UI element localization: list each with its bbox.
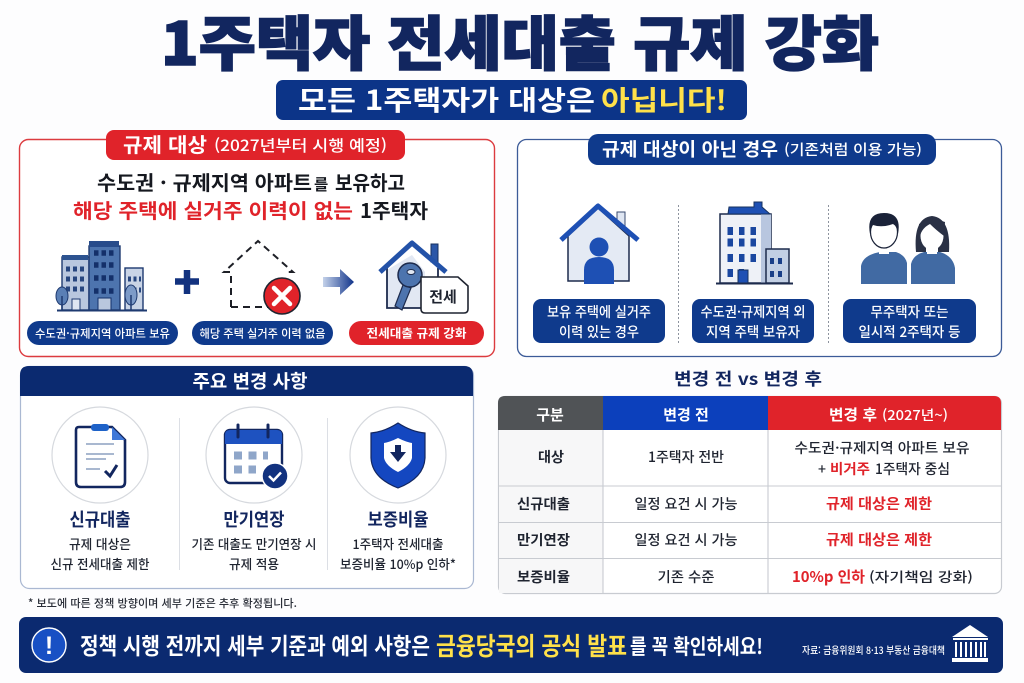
- source: 자료: 금융위원회 8·13 부동산 금융대책: [802, 642, 945, 657]
- item: maturity extension: 만기연장: [224, 506, 285, 532]
- row: maturity extension: 만기연장: [517, 530, 570, 550]
- item: guarantee ratio: 1주택자 전세대출: [352, 534, 444, 553]
- target description: 보유하고: [335, 167, 405, 196]
- subtitle banner: [276, 78, 747, 120]
- row: target: 대상: [538, 447, 564, 467]
- target description: [73, 167, 428, 224]
- panel heading: regulated target: 규제 대상: [123, 129, 207, 158]
- item: new loans: 신규 전세대출 제한: [50, 554, 150, 573]
- row: target: 1주택자 중심: [875, 459, 950, 479]
- icon: two people: [861, 213, 955, 284]
- row: target: 비거주: [830, 459, 870, 479]
- item: new loans: [50, 407, 150, 573]
- comparison table: [498, 396, 1002, 594]
- subtitle banner: 아닙니다!: [601, 78, 727, 118]
- panel heading: not regulated: [588, 134, 936, 165]
- item: new loans: 규제 대상은: [69, 534, 131, 553]
- panel heading: not regulated: 규제 대상이 아닌 경우: [602, 136, 778, 162]
- target description: 수도권 · 규제지역 아파트: [97, 167, 312, 196]
- label: tighter regulation: 전세대출 규제 강화: [366, 324, 466, 342]
- row: target: +: [818, 459, 826, 479]
- label: has lived in home: [533, 299, 665, 343]
- row: target: 1주택자 전반: [648, 447, 724, 467]
- panel heading: not regulated: (기존처럼 이용 가능): [784, 139, 922, 160]
- label: no residence history: 해당 주택 실거주 이력 없음: [200, 326, 326, 342]
- label: non-owner or temporary two-home owner: 무주택자 또는: [870, 302, 949, 322]
- panel: key changes: [20, 366, 474, 588]
- icon: house with key and jeonse document: 전세: [429, 286, 457, 307]
- row: maturity extension: 일정 요건 시 가능: [634, 530, 738, 550]
- label: apartment ownership: [27, 321, 178, 345]
- icon: clipboard: [76, 424, 125, 487]
- icon: institution building: [952, 625, 988, 662]
- header: after: [768, 396, 1001, 430]
- row: guarantee ratio: (자기책임 강화): [869, 566, 973, 586]
- icon: exclamation: [32, 628, 66, 662]
- header: before: 변경 전: [663, 404, 709, 425]
- icon: shield: [371, 423, 425, 488]
- target description: 를: [314, 173, 328, 195]
- item: maturity extension: 규제 적용: [229, 554, 279, 573]
- label: outside regulated area: 지역 주택 보유자: [706, 322, 800, 342]
- label: has lived in home: 보유 주택에 실거주: [547, 302, 651, 322]
- label: non-owner or temporary two-home owner: 일시적 2주택자 등: [858, 322, 961, 342]
- row: guarantee ratio: 보증비율: [517, 567, 570, 587]
- item: guarantee ratio: 보증비율: [368, 506, 428, 532]
- label: has lived in home: 이력 있는 경우: [559, 322, 639, 342]
- label: no residence history: [192, 321, 333, 345]
- item: guarantee ratio: 보증비율 10%p 인하*: [340, 554, 456, 573]
- header: category: [498, 396, 603, 430]
- panel heading: regulated target: (2027년부터 시행 예정): [214, 134, 387, 156]
- panel heading: key changes: 주요 변경 사항: [192, 368, 308, 394]
- panel heading: regulated target: [106, 129, 405, 160]
- label: apartment ownership: 수도권·규제지역 아파트 보유: [35, 326, 170, 342]
- item: guarantee ratio: [340, 407, 456, 573]
- panel: regulated target: [20, 129, 494, 356]
- target description: 1주택자: [360, 195, 428, 224]
- icon: office building: [716, 202, 793, 284]
- icon: calendar with check: [225, 425, 288, 489]
- icon: apartment buildings: [56, 241, 147, 311]
- row: target: 수도권·규제지역 아파트 보유: [794, 438, 970, 458]
- footer message: 금융당국의 공식 발표: [436, 627, 627, 663]
- label: outside regulated area: 수도권·규제지역 외: [700, 302, 806, 322]
- icon: plus: [175, 270, 199, 294]
- panel heading: key changes: [20, 366, 473, 396]
- header: after: 변경 후: [829, 404, 877, 425]
- label: tighter regulation: [349, 321, 484, 345]
- icon: dashed house with x: [224, 241, 300, 314]
- target description: 해당 주택에 실거주 이력이 없는: [73, 195, 353, 224]
- item: maturity extension: 기존 대출도 만기연장 시: [192, 534, 316, 553]
- footer message: [80, 627, 763, 663]
- row: new loans: 규제 대상은 제한: [826, 493, 932, 514]
- arrow: [323, 269, 354, 295]
- label: outside regulated area: [692, 299, 814, 343]
- header: before: [603, 396, 768, 430]
- row: maturity extension: [517, 529, 932, 550]
- icon: exclamation: !: [45, 632, 53, 660]
- label: non-owner or temporary two-home owner: [843, 299, 976, 343]
- header: category: 구분: [536, 404, 564, 425]
- item: new loans: 신규대출: [70, 506, 130, 532]
- row: new loans: [517, 493, 932, 514]
- icon: house with resident: [561, 206, 638, 284]
- row: target: [538, 438, 970, 479]
- panel: not regulated: [518, 134, 1002, 356]
- icon: house with key and jeonse document: [380, 243, 468, 313]
- row: maturity extension: 규제 대상은 제한: [826, 529, 932, 550]
- row: new loans: 신규대출: [517, 494, 570, 514]
- footnote: * 보도에 따른 정책 방향이며 세부 기준은 추후 확정됩니다.: [28, 595, 297, 611]
- row: guarantee ratio: [517, 566, 973, 587]
- item: maturity extension: [192, 407, 316, 573]
- footer banner: [19, 617, 1003, 673]
- row: new loans: 일정 요건 시 가능: [634, 494, 738, 514]
- footer message: 정책 시행 전까지 세부 기준과 예외 사항은: [80, 627, 430, 661]
- row: guarantee ratio: 기존 수준: [658, 567, 715, 587]
- row: guarantee ratio: 10%p 인하: [792, 566, 865, 587]
- header: after: (2027년~): [882, 404, 948, 424]
- footer message: 를 꼭 확인하세요!: [630, 631, 763, 661]
- table row heads background: [499, 430, 603, 593]
- subtitle banner: 모든 1주택자가 대상은: [298, 78, 595, 118]
- table heading: 변경 전 vs 변경 후: [674, 365, 822, 390]
